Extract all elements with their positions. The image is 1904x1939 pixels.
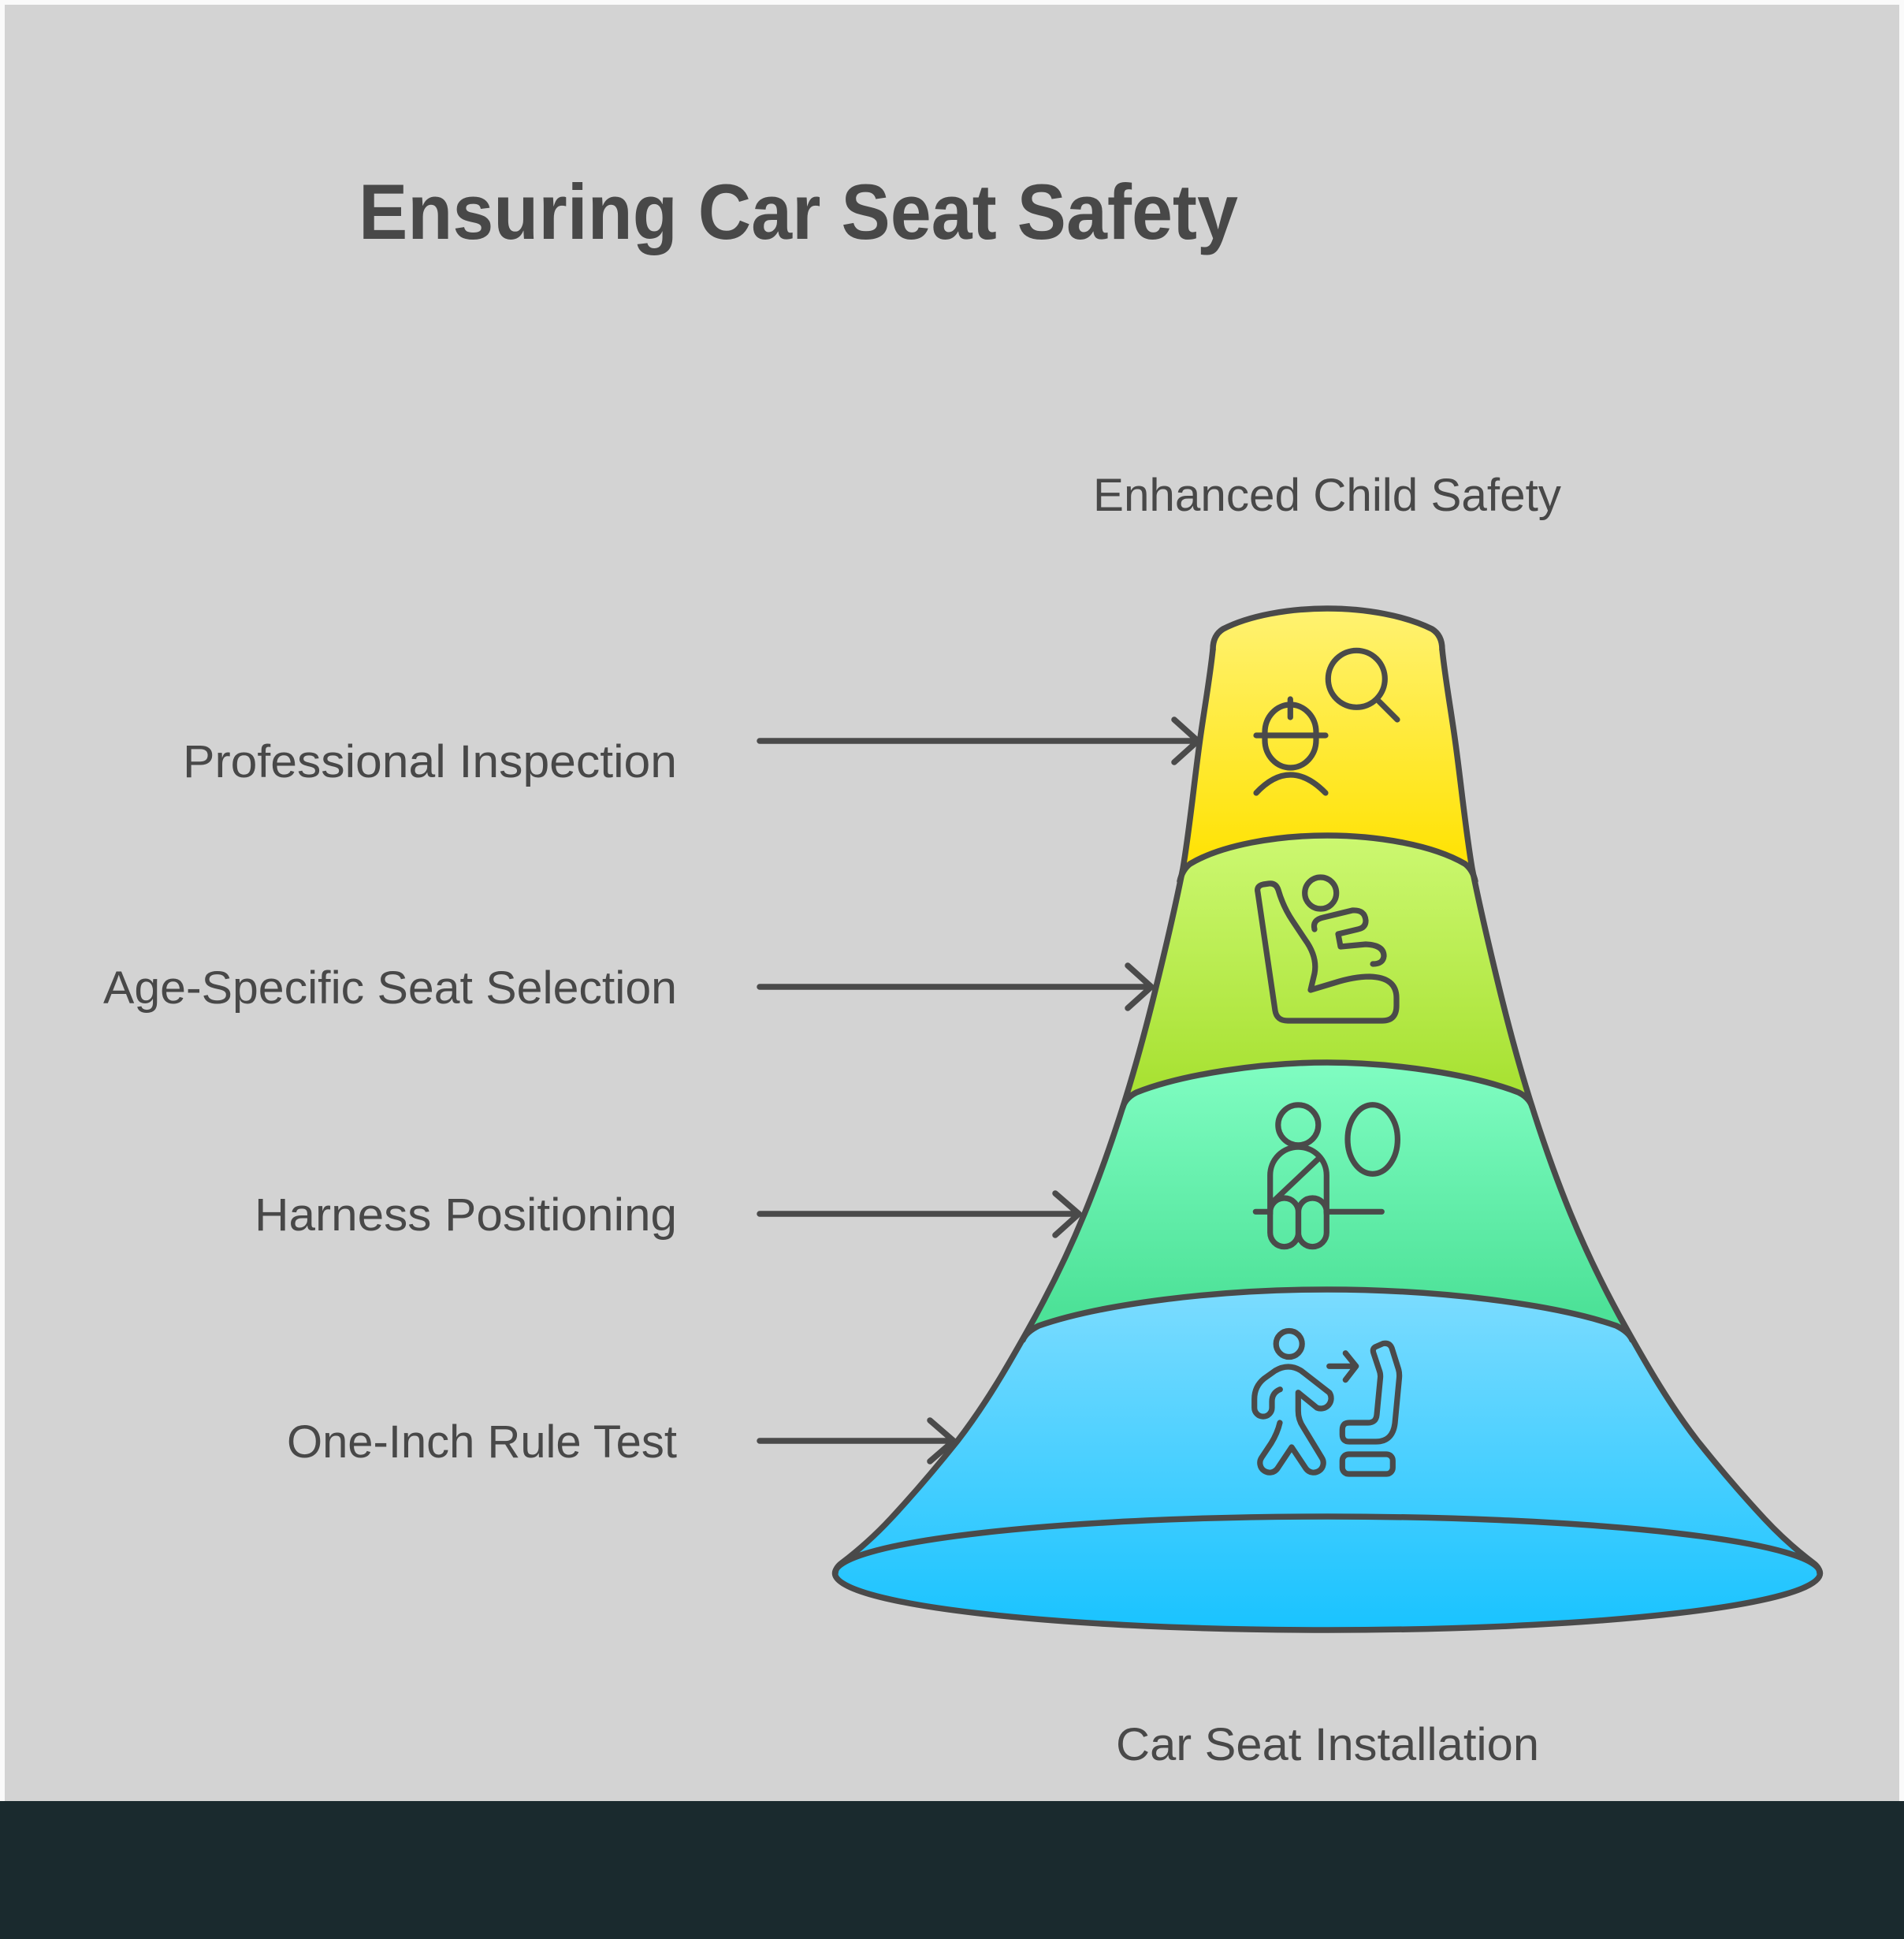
funnel right edge <box>1442 649 1820 1573</box>
label: bottom of funnel: Car Seat Installation <box>1116 1719 1539 1770</box>
label: top of funnel: Enhanced Child Safety <box>1093 470 1561 521</box>
band: professional inspection <box>1183 608 1472 869</box>
band: one-inch rule test <box>835 1290 1820 1573</box>
icon: child with harness <box>1255 1105 1397 1247</box>
icon: person walking to seat <box>1255 1331 1400 1474</box>
funnel left edge <box>835 649 1213 1573</box>
funnel base ellipse <box>835 1517 1820 1630</box>
label: age-specific seat selection: Age-Specific Seat Selection <box>103 962 677 1014</box>
title: Ensuring Car Seat Safety <box>359 168 1238 255</box>
label: harness positioning: Harness Positioning <box>255 1189 677 1241</box>
icon: inspector with helmet and magnifier <box>1256 650 1397 793</box>
arrow: harness positioning <box>760 1193 1079 1235</box>
footer bar <box>0 1801 1904 1939</box>
band: harness positioning <box>1028 1063 1627 1329</box>
label: professional inspection: Professional Inspection <box>183 736 677 787</box>
arrow: age-specific seat selection <box>760 966 1151 1008</box>
arrow: professional inspection <box>760 720 1198 762</box>
arrow: one-inch rule test <box>760 1420 954 1461</box>
icon: child car seat <box>1258 877 1396 1021</box>
band: age-specific seat selection <box>1126 836 1529 1096</box>
label: one-inch rule test: One-Inch Rule Test <box>287 1416 677 1468</box>
